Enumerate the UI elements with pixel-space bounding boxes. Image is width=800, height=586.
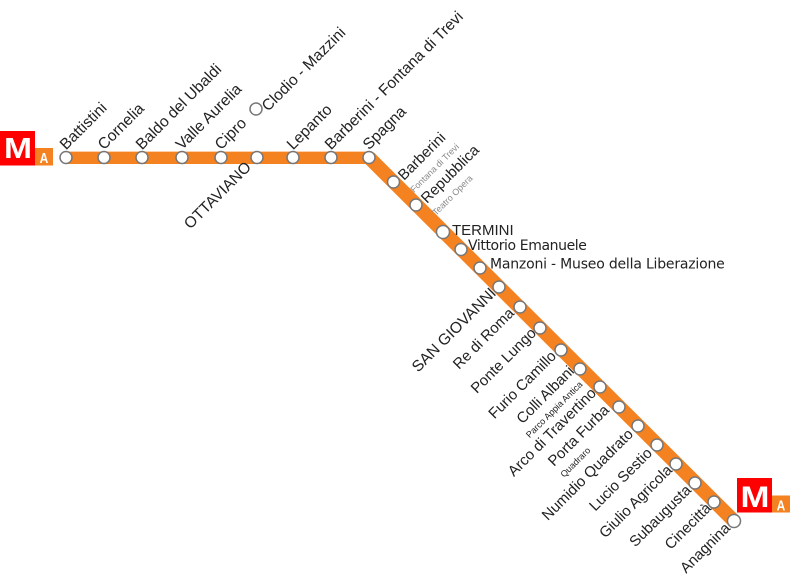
logo: end terminus: [737, 478, 790, 514]
labels: upper stations: Cornelia: [95, 100, 148, 153]
labels: lower secondary names: [524, 379, 592, 479]
labels: lower stations: SAN GIOVANNI: [409, 285, 500, 376]
station markers: [60, 103, 740, 528]
labels: lower stations: Lucio Sestio: [586, 445, 656, 515]
labels: upper stations: Barberini - Fontana di Trevi: [322, 8, 467, 153]
labels: Barberini and Repubblica: Barberini: [395, 129, 449, 184]
labels: lower stations: Colli Albani: [513, 363, 578, 427]
labels: lower stations: Giulio Agricola: [596, 461, 676, 542]
labels: lower stations: Porta Furba: [545, 401, 613, 470]
labels: upper stations: Spagna: [360, 103, 410, 153]
labels: horizontal stations: TERMINI: [452, 222, 514, 239]
labels: Barberini and Repubblica: Repubblica: [418, 141, 483, 207]
labels: Barberini and Repubblica: Fontana di Trevi: [408, 142, 461, 194]
labels: lower stations: Furio Camillo: [485, 348, 560, 422]
label: Ottaviano: OTTAVIANO: [181, 159, 255, 233]
labels: Barberini and Repubblica: Teatro Opera: [430, 173, 475, 217]
labels: horizontal stations: [452, 222, 725, 272]
labels: horizontal stations: Vittorio Emanuele: [468, 238, 586, 254]
labels: lower stations: Cinecittà: [662, 499, 715, 553]
logo: start terminus: A: [40, 150, 49, 166]
labels: upper stations: Clodio - Mazzini: [259, 24, 349, 115]
logo: start terminus: [0, 131, 53, 166]
logo: end terminus: A: [777, 497, 786, 514]
labels: lower stations: Arco di Travertino: [505, 385, 600, 480]
labels: lower secondary names: Quadraro: [558, 445, 592, 479]
labels: upper stations: Lepanto: [284, 101, 336, 153]
labels: upper stations: Cipro: [212, 115, 250, 153]
labels: Barberini and Repubblica: [395, 129, 483, 217]
labels: upper stations: Baldo del Ubaldi: [133, 61, 225, 153]
labels: lower stations: Numidio Quadrato: [539, 426, 637, 524]
labels: upper stations: Battistini: [57, 100, 111, 153]
labels: upper stations: [57, 8, 467, 153]
labels: upper stations: Valle Aurelia: [173, 81, 246, 153]
line route: [66, 158, 734, 521]
labels: horizontal stations: Manzoni - Museo della Liberazione: [490, 256, 725, 272]
labels: lower stations: [409, 285, 734, 577]
labels: lower stations: Anagnina: [677, 519, 734, 577]
logo: start terminus: M: [4, 132, 32, 164]
labels: lower stations: Subaugusta: [626, 481, 695, 550]
logo: end terminus: M: [741, 480, 769, 513]
labels: lower stations: Ponte Lungo: [468, 325, 540, 397]
labels: lower stations: Re di Roma: [450, 304, 518, 373]
labels: lower secondary names: Parco Appia Antica: [524, 379, 584, 440]
